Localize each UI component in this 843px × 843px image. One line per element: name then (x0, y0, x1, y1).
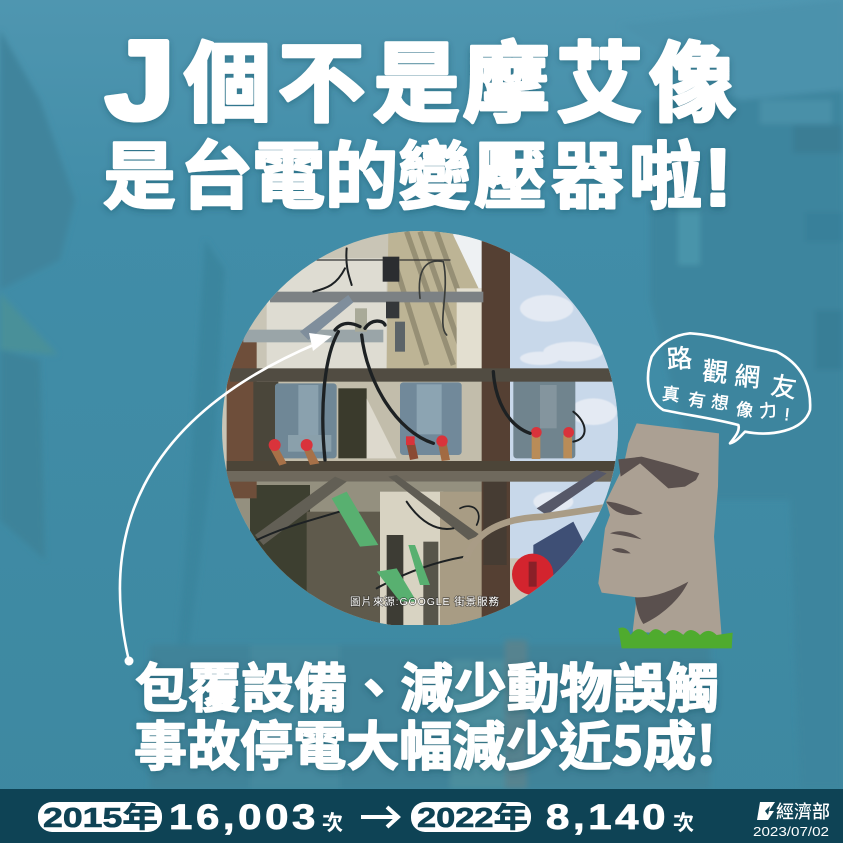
left pole (227, 338, 257, 498)
main pole (482, 238, 510, 625)
ministry logo: 2023/07/02 (753, 825, 829, 839)
bubble text: 想 (710, 391, 730, 414)
2015 count: 16,003 (169, 798, 319, 837)
transformers (275, 379, 575, 458)
title line 1: J (105, 18, 175, 143)
moai character with sunglasses (598, 423, 733, 648)
nose shadow (606, 502, 643, 515)
photo circle: transformers on utility pole (220, 225, 620, 625)
2022 count: 次 (673, 807, 694, 837)
bubble text: 像 (734, 399, 755, 421)
lips (610, 531, 642, 553)
chin shadow (635, 582, 688, 624)
green plants (332, 492, 430, 602)
2022 count: 8,140 (546, 798, 669, 837)
bottom statistics band (0, 789, 843, 843)
curved arrow to the wire covers (120, 333, 332, 666)
2022 pill: 2022年 (417, 802, 528, 833)
bubble text: 友 (769, 372, 798, 403)
speech bubble (648, 333, 810, 443)
sky (220, 225, 620, 625)
2015 count: 次 (322, 807, 343, 837)
bubble text: 真 (661, 383, 681, 405)
bubble text: 有 (687, 389, 707, 411)
grass (618, 627, 733, 648)
bubble text: 觀 (701, 357, 729, 388)
moai body (598, 423, 722, 637)
bubble text: ! (784, 404, 790, 424)
title line 1: 個不是摩艾像 (184, 14, 736, 140)
red insulator caps (269, 427, 574, 466)
title line 2: ! (705, 133, 731, 222)
buildings (220, 228, 583, 625)
bubble text: 力 (758, 400, 778, 421)
photo credit: 圖片來源:GOOGLE 街景服務 (350, 595, 500, 608)
statement line 2: 事故停電大幅減少近5成! (134, 705, 716, 781)
arrow (361, 807, 398, 827)
title line 2: 是台電的變壓器啦 (103, 118, 702, 224)
ministry logo: 經濟部 (776, 802, 830, 822)
bubble text (661, 345, 798, 424)
2015 pill: 2015年 (43, 802, 158, 833)
ministry logo (753, 802, 830, 839)
bubble text: 網 (733, 362, 761, 393)
street lamp arm (465, 507, 610, 562)
upper cross-arms (243, 257, 483, 352)
black cables (253, 248, 585, 588)
red lantern (512, 554, 553, 595)
sunglasses (618, 457, 699, 488)
horizontal steel beams (227, 368, 620, 545)
bubble text: 路 (666, 345, 693, 374)
statement line 1: 包覆設備、減少動物誤觸 (135, 647, 719, 723)
